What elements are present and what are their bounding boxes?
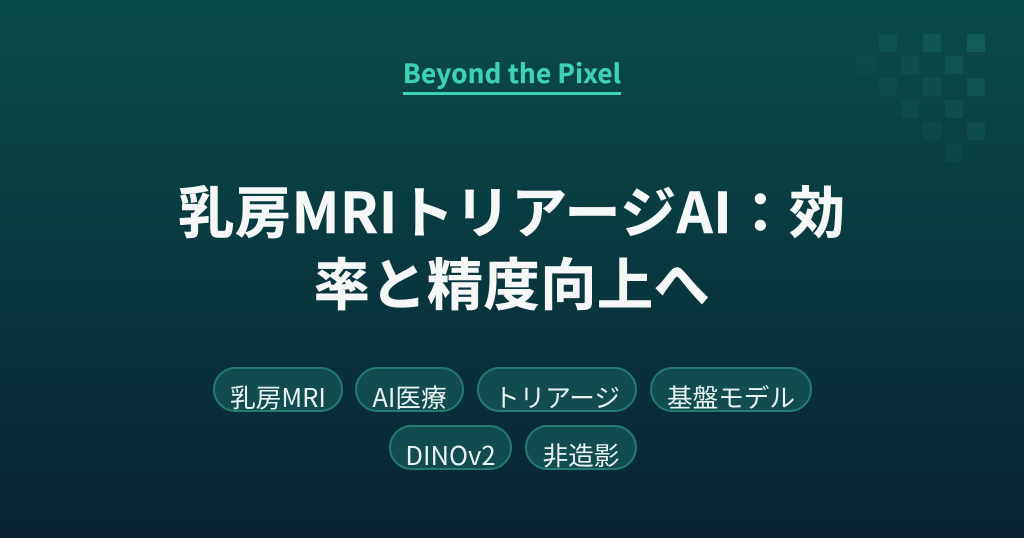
tag: 非造影 — [525, 425, 637, 470]
tag: AI医療 — [355, 367, 464, 412]
tag: 基盤モデル: 基盤モデル — [667, 378, 795, 415]
tag: DINOv2: DINOv2 — [405, 436, 496, 473]
tag: トリアージ: トリアージ — [494, 378, 620, 415]
title — [178, 169, 846, 322]
title: 乳房MRIトリアージAI：効 — [178, 169, 846, 250]
tag: 非造影: 非造影 — [543, 436, 619, 473]
tag: トリアージ — [477, 367, 637, 412]
tag row — [213, 367, 812, 473]
tag: DINOv2 — [389, 425, 512, 470]
eyebrow heading: Beyond the Pixel: Beyond the Pixel — [403, 54, 621, 91]
decorative pixel grid icon — [879, 34, 985, 140]
tag: 乳房MRI — [213, 367, 343, 412]
tag: 基盤モデル — [650, 367, 812, 412]
tag: AI医療: AI医療 — [372, 378, 447, 415]
tag: 乳房MRI: 乳房MRI — [230, 378, 326, 415]
title: 率と精度向上へ — [314, 241, 710, 322]
